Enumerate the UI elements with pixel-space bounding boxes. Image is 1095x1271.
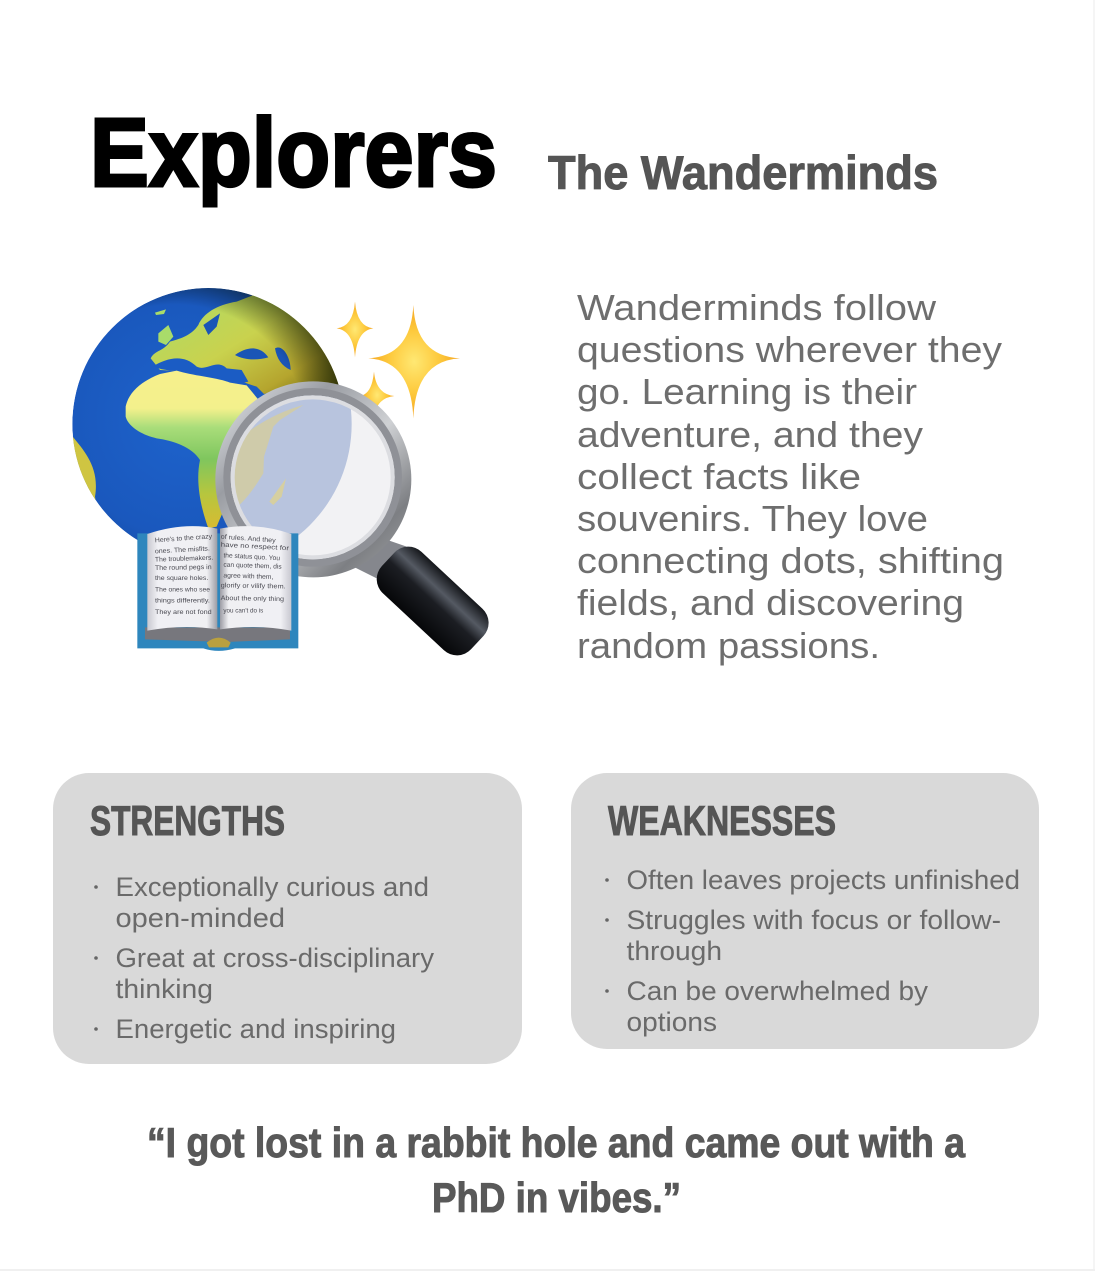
- icon: open book: [137, 526, 298, 651]
- illustration: globe, magnifier, book, sparkles: [65, 281, 497, 663]
- book text right page: can quote them, dis: [223, 562, 282, 571]
- description text: connecting dots, shifting: [577, 540, 1004, 581]
- icon: sparkles: [337, 302, 460, 418]
- panel: strengths: [53, 773, 522, 1064]
- book text left page: The round pegs in: [155, 564, 212, 572]
- weaknesses list: Often leaves projects unfinished: [626, 865, 1020, 895]
- description text: [577, 287, 1004, 666]
- Eurasia: [150, 296, 339, 394]
- book text right page: you can't do is: [223, 608, 264, 615]
- subtitle: The Wanderminds: [548, 146, 938, 199]
- book text right page: agree with them,: [223, 572, 274, 581]
- quote: [147, 1119, 966, 1221]
- quote: “I got lost in a rabbit hole and came out with a: [147, 1119, 966, 1166]
- icon: globe: [72, 288, 339, 540]
- description text: Wanderminds follow: [577, 287, 937, 328]
- book text left page: the square holes.: [155, 575, 208, 582]
- book text left page: [155, 533, 214, 616]
- book text left page: The ones who see: [155, 586, 210, 593]
- strengths list: Exceptionally curious and: [116, 872, 429, 902]
- book text left page: The troublemakers.: [155, 555, 214, 564]
- strengths list: Great at cross-disciplinary: [116, 943, 434, 973]
- book text right page: About the only thing: [221, 595, 284, 603]
- icon: magnifying glass: [144, 381, 489, 656]
- book text right page: [221, 534, 290, 615]
- description text: random passions.: [577, 625, 880, 666]
- description text: fields, and discovering: [577, 582, 964, 623]
- weaknesses list: Can be overwhelmed by: [626, 976, 929, 1006]
- weaknesses list: Struggles with focus or follow-: [626, 905, 1001, 935]
- book text left page: They are not fond: [155, 609, 212, 616]
- South America: [72, 436, 96, 500]
- Black and Caspian seas: [203, 313, 291, 370]
- description text: questions wherever they: [577, 329, 1002, 370]
- heading: weaknesses: WEAKNESSES: [608, 797, 836, 844]
- description text: go. Learning is their: [577, 371, 917, 412]
- book text right page: have no respect for: [221, 542, 290, 552]
- book text left page: Here's to the crazy: [155, 533, 213, 544]
- title: Explorers: [90, 98, 497, 207]
- description text: adventure, and they: [577, 414, 923, 455]
- description text: souvenirs. They love: [577, 498, 928, 539]
- Africa: [126, 370, 258, 528]
- strengths list: Energetic and inspiring: [116, 1014, 396, 1044]
- strengths list: thinking: [116, 974, 213, 1004]
- book text right page: glorify or vilify them.: [221, 582, 286, 590]
- book text right page: the status quo. You: [223, 552, 280, 562]
- Mediterranean: [153, 358, 248, 382]
- weaknesses list: [605, 865, 1020, 1037]
- weaknesses list: options: [626, 1007, 717, 1037]
- heading: strengths: STRENGTHS: [90, 797, 285, 844]
- strengths list: open-minded: [116, 903, 285, 933]
- panel: weaknesses: [571, 773, 1039, 1049]
- book text left page: ones. The misfits.: [155, 545, 210, 555]
- UK: [155, 309, 173, 345]
- description text: collect facts like: [577, 456, 861, 497]
- weaknesses list: through: [626, 936, 722, 966]
- book text left page: things differently.: [155, 598, 210, 605]
- quote: PhD in vibes.”: [432, 1174, 681, 1221]
- book text right page: of rules. And they: [221, 534, 277, 545]
- strengths list: [94, 872, 434, 1044]
